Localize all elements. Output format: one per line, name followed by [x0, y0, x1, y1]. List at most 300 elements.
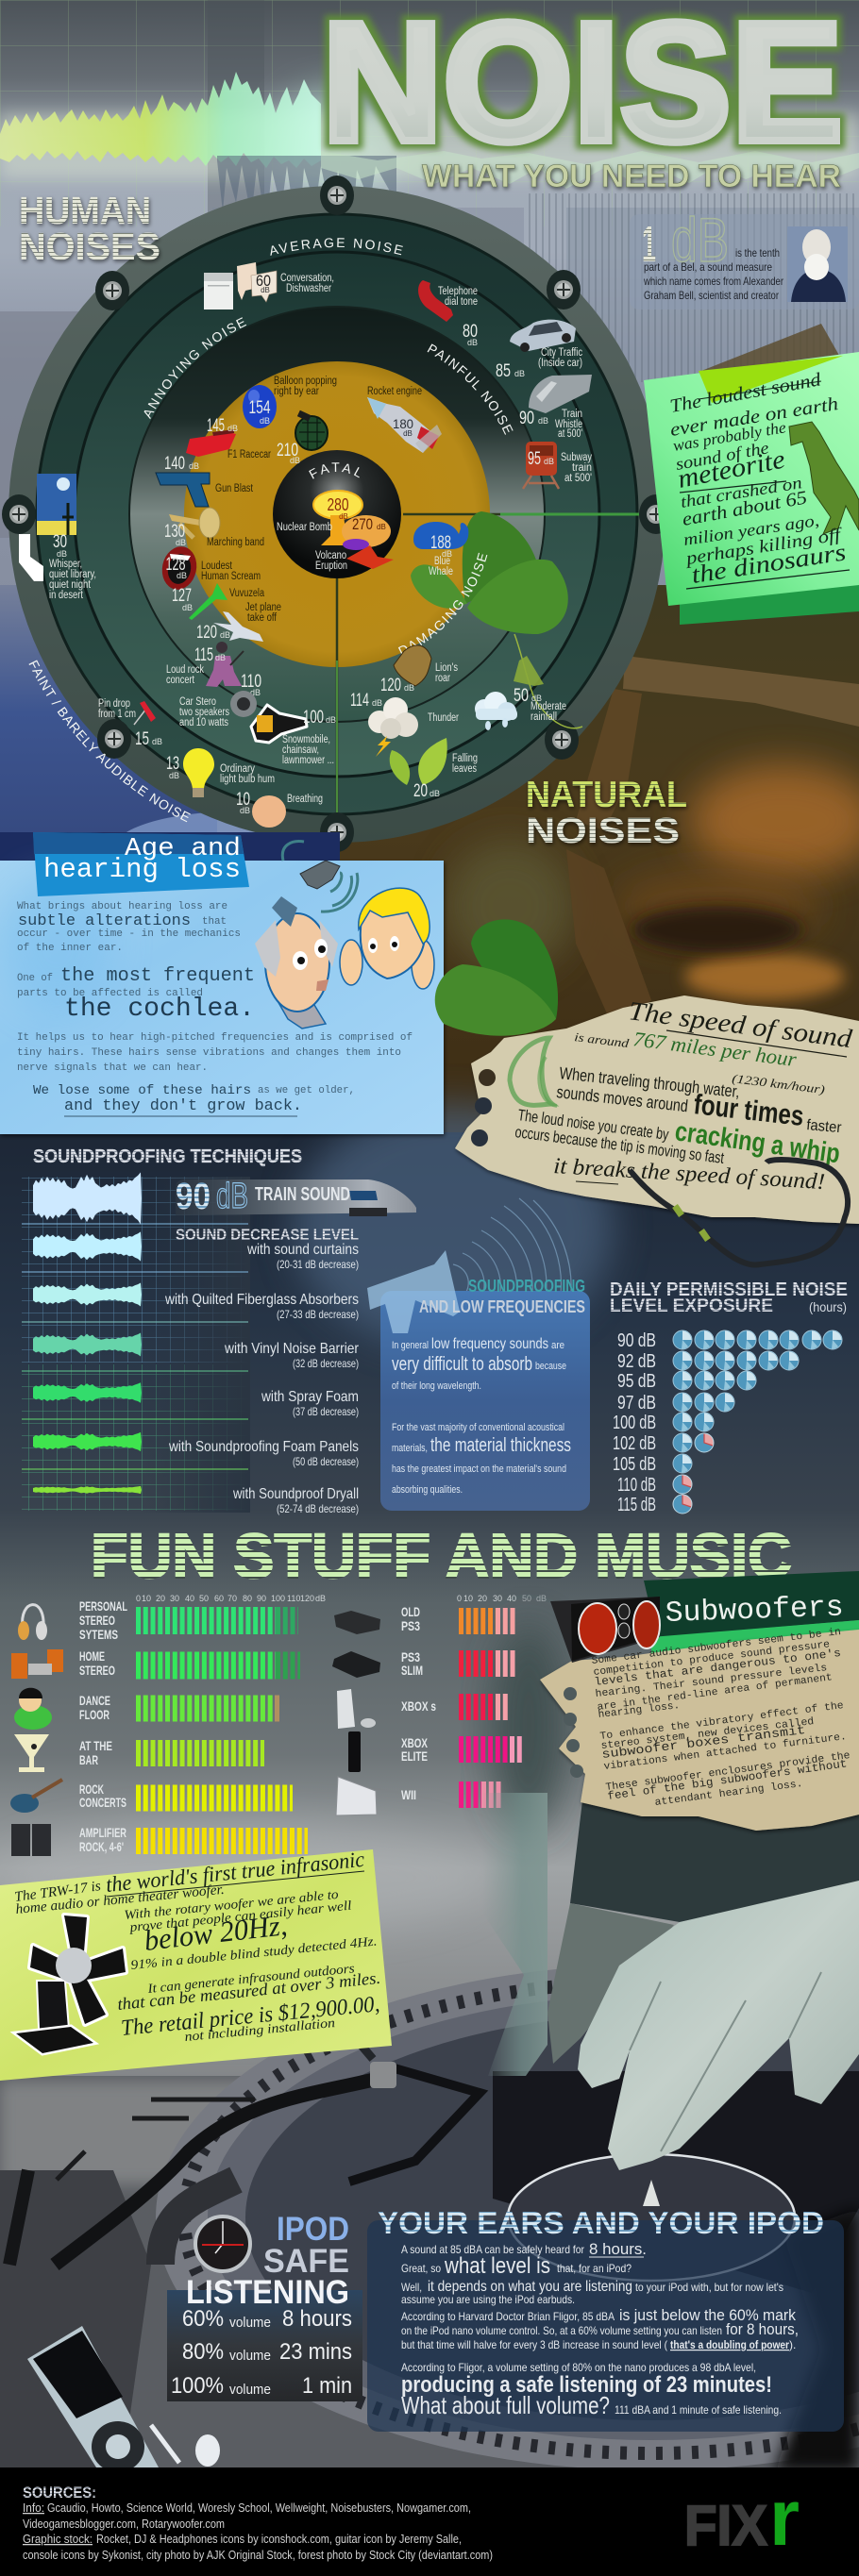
item: car stereo: two speakers: [179, 707, 229, 718]
panel: iPod safe listening: volume: [229, 2315, 271, 2331]
chart: decibel bars for music and spaces: 100: [271, 1594, 285, 1603]
item: lion's roar 120 dB: 120: [380, 676, 401, 695]
item: vuvuzela 127 dB: dB: [182, 603, 193, 612]
item: telephone 80 dB: dial tone: [445, 296, 478, 308]
background: forest: [321, 585, 859, 1151]
panel: iPod safe listening: IPOD: [277, 2211, 349, 2248]
item: train whistle 90 dB: Whistle: [555, 419, 582, 430]
icon: dishwasher: [204, 273, 233, 309]
chart: games consoles: XBOX s: [401, 1698, 436, 1714]
labels: sound decrease levels: with Vinyl Noise Barrier: [224, 1341, 360, 1357]
item: train whistle 90 dB: dB: [538, 416, 548, 426]
item: telephone 80 dB: Telephone: [438, 286, 478, 297]
labels: sound decrease levels: with Spray Foam: [261, 1389, 359, 1405]
footer: sources: Gcaudio, Howto, Science World, Woresly School, Wellweight, Noisebusters, Nowgamer.com,: [47, 2501, 471, 2515]
item: rocket engine 180 dB: [367, 386, 442, 453]
heading: soundproofing techniques: SOUNDPROOFING TECHNIQUES: [33, 1146, 302, 1167]
chart: daily permissible noise level exposure: 97 dB: [617, 1393, 656, 1413]
chart: decibel bars for music and spaces: [0, 1571, 859, 2576]
chart: decibel bars for music and spaces: HOME: [79, 1648, 105, 1664]
item: whisper 30 dB: quiet library,: [49, 569, 96, 580]
item: car stereo: and 10 watts: [179, 717, 228, 728]
item: whisper 30 dB: dB: [57, 549, 67, 559]
icon: portrait of Alexander Graham Bell: [787, 226, 848, 302]
body text: that: [202, 916, 227, 928]
item: balloon 154 dB: right by ear: [274, 386, 319, 397]
panel: your ears and your iPod: for 8 hours,: [726, 2320, 799, 2338]
chart: decibel bars for music and spaces: 30: [170, 1594, 179, 1603]
hand over record: [482, 1793, 859, 2170]
speed of sound note: 767 miles per hour: [632, 1027, 799, 1071]
ring labels: FATAL: [309, 462, 360, 479]
panel: iPod safe listening: 1 min: [302, 2373, 352, 2399]
item: chainsaw 100 dB: chainsaw,: [282, 744, 319, 756]
chart: daily permissible noise level exposure: 92 dB: [617, 1351, 656, 1372]
heading: natural noises: [526, 775, 687, 851]
item: volcano eruption 270 dB: Volcano: [315, 550, 346, 561]
item: car stereo: [179, 691, 257, 728]
chart: daily permissible noise level exposure: 90 dB: [617, 1330, 656, 1351]
note: infrasonic woofer: [0, 1848, 392, 2081]
item: volcano eruption 270 dB: 270: [352, 515, 373, 533]
item: 60 dB conversation: [237, 262, 334, 302]
item: chainsaw 100 dB: lawnmower ...: [282, 755, 334, 766]
ring labels: AVERAGE NOISE: [270, 238, 403, 256]
item: breathing 10 dB: Breathing: [287, 794, 323, 805]
panel: soundproofing and low frequencies: of their long wavelength.: [392, 1380, 481, 1392]
item: telephone 80 dB: 80: [463, 322, 478, 342]
item: human scream 128 dB: 128: [166, 555, 185, 575]
item: thunder 114 dB: Thunder: [428, 712, 459, 724]
speed of sound note: When traveling through water,: [559, 1063, 741, 1101]
item: city traffic 85 dB: City Traffic: [541, 347, 582, 359]
item: moderate rainfall 50 dB: dB: [531, 694, 542, 703]
item: breathing 10 dB: [236, 790, 323, 828]
labels: sound decrease levels: with sound curtains: [246, 1242, 359, 1258]
subwoofers panel: levels that are dangerous to one's: [594, 1647, 842, 1689]
chart: decibel bars for music and spaces: STEREO: [79, 1663, 115, 1678]
item: lion's roar 120 dB: roar: [435, 673, 450, 684]
sticky note: loudest sound: meteorite: [675, 444, 787, 494]
labels: sound decrease levels: (50 dB decrease): [293, 1455, 359, 1468]
panel: your ears and your iPod: A sound at 85 dBA can be safely heard for: [401, 2243, 584, 2256]
train with 90 dB label: TRAIN SOUND: [255, 1184, 350, 1205]
item: vuvuzela 127 dB: Vuvuzela: [229, 588, 264, 599]
icon: old man: [255, 896, 338, 1029]
ring labels: FAINT / BARELY AUDIBLE NOISE: [28, 661, 191, 823]
chart: decibel bars for music and spaces: 80: [243, 1594, 252, 1603]
body text: tiny hairs. These hairs sense vibrations and changes them into: [17, 1047, 401, 1059]
speed of sound note: faster: [806, 1117, 843, 1136]
item: jet plane 120 dB: 120: [196, 623, 217, 643]
icon: Wii: [336, 1777, 377, 1815]
item: falling leaves 20 dB: dB: [430, 789, 440, 798]
speed of sound note: occurs because the tip is moving so fast: [514, 1123, 725, 1167]
speed of sound note: The speed of sound: [627, 996, 854, 1054]
chart: games consoles: XBOX: [401, 1735, 428, 1750]
body text: the cochlea.: [64, 995, 255, 1024]
item: gun blast 140 dB: [156, 454, 254, 507]
item: train whistle 90 dB: Train: [562, 409, 582, 420]
item: vuvuzela 127 dB: [172, 583, 264, 620]
labels: sound decrease levels: with Soundproofing Foam Panels: [168, 1439, 359, 1455]
icon: cocktail: [14, 1734, 49, 1772]
panel: age and hearing loss: [0, 832, 444, 1134]
sticky note: loudest sound: [644, 324, 859, 625]
item: pin drop 15 dB: from 1 cm: [98, 709, 136, 720]
tape heading: hearing loss: [43, 854, 241, 885]
body text: occur - over time - in the mechanics: [17, 928, 241, 940]
body text: One of: [17, 973, 53, 984]
panel: your ears and your iPod: what level is: [444, 2253, 550, 2279]
item: rocket engine 180 dB: dB: [403, 429, 413, 438]
panel: soundproofing and low frequencies: absorbing qualities.: [392, 1484, 463, 1496]
item: whisper 30 dB: [19, 474, 96, 601]
chart: daily permissible noise level exposure: 110 dB: [617, 1475, 656, 1496]
subwoofers panel: vibrations when attached to furniture.: [603, 1731, 848, 1773]
item: light bulb 13 dB: [166, 748, 275, 797]
item: grenade 210 dB: [277, 410, 328, 465]
note: infrasonic woofer: that can be measured at over 3 miles.: [116, 1968, 381, 2014]
item: pin drop 15 dB: dB: [152, 737, 162, 746]
note: infrasonic woofer: 91% in a double blind study detected 4Hz.: [130, 1934, 378, 1973]
speed of sound note: [455, 995, 859, 1224]
icon: PS3 slim: [332, 1651, 380, 1678]
panel: your ears and your iPod: 111 dBA and 1 minute of safe listening.: [615, 2403, 782, 2417]
body text: of the inner ear.: [17, 943, 123, 954]
panel: your ears and your iPod: producing a safe listening of 23 minutes!: [401, 2372, 772, 2398]
item: telephone 80 dB: dB: [467, 338, 478, 347]
panel: your ears and your iPod: Great, so: [401, 2262, 441, 2275]
sticky note: loudest sound: the dinosaurs: [690, 538, 848, 589]
icon: home stereo: [11, 1649, 63, 1679]
panel: your ears and your iPod: assume you are using the iPod earbuds.: [401, 2293, 575, 2306]
item: car stereo: Car Stero: [179, 696, 216, 708]
body text: nerve signals that we can hear.: [17, 1062, 208, 1074]
item: falling leaves 20 dB: Falling: [452, 753, 478, 764]
footer: sources: console icons by Sykonist, city photo by AJK Original Stock, forest photo by Stock City (deviantart.com): [23, 2548, 493, 2562]
item: rock concert 115 dB: concert: [166, 675, 195, 686]
item: rock concert 115 dB: dB: [250, 688, 261, 697]
item: pin drop 15 dB: [98, 698, 162, 749]
item: jet plane 120 dB: Jet plane: [245, 602, 281, 613]
item: moderate rainfall 50 dB: Moderate: [531, 701, 566, 712]
ring labels: [28, 238, 514, 823]
heading: human noises: HUMAN: [19, 189, 151, 232]
logo: FIXr: [684, 2473, 800, 2562]
chart: decibel bars for music and spaces: 20: [156, 1594, 165, 1603]
item: marching band 130 dB: dB: [176, 538, 186, 547]
icon: Xbox Elite: [348, 1731, 361, 1772]
item: moderate rainfall 50 dB: [475, 686, 566, 730]
panel: your ears and your iPod: [367, 2205, 844, 2432]
item: balloon 154 dB: 154: [249, 398, 271, 418]
note: infrasonic woofer: not including installation: [184, 2016, 336, 2045]
subwoofers panel: stereo system, new devices called: [600, 1716, 815, 1752]
item: gun blast 140 dB: dB: [189, 461, 199, 471]
chart: games consoles: 10: [463, 1594, 473, 1603]
subwoofers panel: These subwoofer enclosures provide the: [605, 1750, 851, 1794]
item: lion's roar 120 dB: dB: [404, 683, 414, 693]
sticky note: loudest sound: that crashed on: [679, 473, 803, 511]
item: balloon 154 dB: Balloon popping: [274, 376, 337, 387]
item: F1 racecar 145 dB: F1 Racecar: [227, 449, 271, 460]
chart: games consoles: 20: [478, 1594, 487, 1603]
background: dark and grey lower section: [0, 1104, 859, 2076]
body text: and they don't grow back.: [64, 1097, 302, 1115]
footer: sources: Videogamesblogger.com, Rotarywoofer.com: [23, 2517, 225, 2531]
subwoofers panel: feel of the big subwoofers without: [607, 1757, 848, 1803]
item: chainsaw 100 dB: dB: [326, 715, 336, 725]
icon: clock: [195, 2216, 250, 2271]
waveform banner: [0, 72, 859, 245]
chart: daily permissible noise level exposure: LEVEL EXPOSURE: [610, 1296, 773, 1316]
item: subway train 95 dB: train: [572, 462, 592, 474]
chart: circular noise dial: [2, 176, 663, 851]
item: grenade 210 dB: 210: [277, 441, 298, 460]
sticky note: loudest sound: earth about 65: [681, 487, 809, 530]
item: human scream 128 dB: [159, 544, 261, 593]
icon: rotary woofer fan: [16, 1915, 126, 2053]
item: blue whale 188 dB: Blue: [434, 556, 450, 567]
body text: parts to be affected is called: [17, 988, 203, 999]
speed of sound note: four times: [692, 1089, 805, 1132]
panel: iPod safe listening: volume: [229, 2348, 271, 2364]
labels: sound decrease levels: (32 dB decrease): [293, 1357, 359, 1370]
item: jet plane 120 dB: dB: [220, 630, 230, 640]
speed of sound note: is around: [574, 1029, 631, 1050]
panel: your ears and your iPod: on the iPod nano volume control. So, at a 60% volume setting you can listen: [401, 2324, 722, 2337]
subwoofers panel: To enhance the vibratory effect of the: [599, 1700, 844, 1743]
item: 60 dB conversation: dB: [261, 286, 270, 294]
note: infrasonic woofer: home audio or home theater woofer.: [15, 1882, 225, 1917]
icon: headphones: [18, 1605, 47, 1640]
labels: sound decrease levels: SOUND DECREASE LEVEL: [176, 1226, 359, 1244]
item: whisper 30 dB: Whisper,: [49, 559, 82, 570]
chart: decibel bars for music and spaces: ROCK, 4-6': [79, 1839, 124, 1854]
item: falling leaves 20 dB: 20: [413, 781, 428, 801]
chart: decibel bars for music and spaces: 60: [214, 1594, 224, 1603]
panel: your ears and your iPod: Well,: [401, 2281, 422, 2294]
note: infrasonic woofer: The TRW-17 is: [13, 1879, 102, 1905]
item: thunder 114 dB: 114: [350, 691, 369, 711]
tonearm: [9, 2033, 480, 2265]
subwoofers panel: attendant hearing loss.: [654, 1779, 803, 1809]
heading: natural noises: NATURAL: [526, 775, 687, 815]
item: human scream 128 dB: Human Scream: [201, 571, 261, 582]
chart: decibel bars for music and spaces: 0: [136, 1594, 141, 1603]
sticky note: loudest sound: The loudest sound: [668, 369, 823, 417]
tape heading: Age and: [125, 835, 241, 863]
note: infrasonic woofer: It can generate infrasound outdoors: [146, 1962, 356, 1997]
panel: your ears and your iPod: to your iPod with, but for now let's: [635, 2281, 783, 2294]
sticky note: loudest sound: sound of the: [674, 438, 770, 474]
chart: games consoles: [332, 1594, 547, 1815]
body text: subtle alterations: [18, 912, 191, 930]
item: blue whale 188 dB: dB: [442, 549, 452, 559]
item: nuclear bomb 280 dB: dB: [339, 512, 348, 521]
item: rock concert 115 dB: Loud rock: [166, 664, 204, 676]
heading: human noises: NOISES: [19, 225, 160, 268]
note: infrasonic woofer: prove that people can easily hear well: [128, 1899, 352, 1935]
note: infrasonic woofer: The retail price is $12,900.00,: [120, 1992, 380, 2041]
subwoofers panel: hearing. Their sound pressure levels: [595, 1663, 828, 1700]
item: pin drop 15 dB: 15: [135, 729, 149, 749]
item: city traffic 85 dB: dB: [514, 369, 525, 378]
heart leaf: [435, 919, 558, 1036]
item: marching band 130 dB: 130: [164, 522, 185, 542]
subwoofers panel: competition to produce sound pressure: [593, 1639, 831, 1679]
item: city traffic 85 dB: [496, 320, 582, 381]
panel: soundproofing and low frequencies: materials,: [392, 1443, 428, 1454]
speed of sound note: The loud noise you create by: [516, 1106, 670, 1144]
item: city traffic 85 dB: (Inside car): [538, 358, 582, 369]
speed of sound note: it breaks the speed of sound!: [553, 1154, 826, 1195]
panel: soundproofing and low frequencies: has the greatest impact on the material's sound: [392, 1464, 566, 1475]
item: blue whale 188 dB: Whale: [429, 566, 453, 577]
chart: decibel bars for music and spaces: AT THE: [79, 1738, 112, 1753]
icon: dinosaur: [789, 422, 859, 534]
panel: 1 dB definition: which name comes from Alexander: [643, 275, 783, 288]
subwoofers panel: Subwoofers: [665, 1591, 844, 1631]
panel: 1 dB definition: 1: [642, 216, 656, 273]
chart: decibel bars for music and spaces: 120: [300, 1594, 314, 1603]
item: city traffic 85 dB: 85: [496, 361, 511, 381]
panel: your ears and your iPod: YOUR EARS AND YOUR IPOD: [378, 2205, 824, 2240]
item: human scream 128 dB: Loudest: [201, 560, 233, 572]
item: gun blast 140 dB: 140: [164, 454, 185, 474]
chart: games consoles: 40: [507, 1594, 516, 1603]
subwoofers panel: Some car audio subwoofers seem to be in: [591, 1627, 842, 1667]
item: light bulb 13 dB: light bulb hum: [220, 774, 275, 785]
chart: games consoles: 30: [493, 1594, 502, 1603]
item: blue whale 188 dB: 188: [430, 533, 451, 553]
panel: iPod safe listening: LISTENING: [186, 2274, 349, 2311]
item: light bulb 13 dB: Ordinary: [220, 763, 255, 775]
speed of sound note: (1230 km/hour): [732, 1071, 826, 1096]
item: rock concert 115 dB: [166, 642, 261, 697]
icon: whistle with sound waves: [282, 842, 358, 912]
subwoofers panel: are in the red-line area of permanent: [597, 1672, 833, 1714]
item: chainsaw 100 dB: Snowmobile,: [282, 734, 330, 745]
item: whisper 30 dB: quiet night: [49, 579, 92, 591]
item: balloon 154 dB: [243, 376, 337, 428]
chart: daily permissible noise level exposure: DAILY PERMISSIBLE NOISE: [610, 1280, 848, 1300]
panel: iPod safe listening: 60%: [182, 2306, 224, 2332]
sticky note: loudest sound: ever made on earth: [668, 393, 840, 441]
item: F1 racecar 145 dB: [186, 416, 271, 460]
panel: your ears and your iPod: but that time will halve for every 3 dB increase in sound level (: [401, 2338, 667, 2351]
panel: iPod safe listening: volume: [229, 2382, 271, 2398]
logo: FIXr: r: [769, 2473, 800, 2562]
item: balloon 154 dB: dB: [260, 416, 270, 426]
icon: blonde child covering ears: [340, 888, 434, 989]
panel: iPod safe listening: [167, 2211, 362, 2401]
item: subway train 95 dB: Subway: [561, 452, 592, 463]
item: pin drop 15 dB: Pin drop: [98, 698, 130, 710]
chart: games consoles: 50: [522, 1594, 531, 1603]
item: falling leaves 20 dB: [390, 738, 478, 801]
panel: your ears and your iPod: ).: [789, 2338, 796, 2351]
train with 90 dB label: 90: [176, 1176, 211, 1217]
labels: sound decrease levels: (37 dB decrease): [293, 1405, 359, 1418]
item: nuclear bomb 280 dB: [277, 491, 362, 545]
chart: daily permissible noise level exposure: 102 dB: [613, 1433, 656, 1454]
item: jet plane 120 dB: [196, 602, 281, 643]
chart: decibel bars for music and spaces: STEREO: [79, 1613, 115, 1628]
platter: [0, 1965, 859, 2472]
item: light bulb 13 dB: dB: [169, 771, 179, 780]
body text: We lose some of these hairs: [33, 1083, 251, 1098]
screws: [2, 176, 673, 852]
footer: sources: Graphic stock:: [23, 2532, 93, 2546]
footer: sources: Rocket, DJ & Headphones icons by iconshock.com, guitar icon by Jeremy Salle,: [96, 2532, 462, 2546]
item: rock concert 115 dB: dB: [215, 653, 226, 662]
item: vuvuzela 127 dB: 127: [172, 586, 192, 606]
icon: DJ: [14, 1688, 52, 1730]
chart: games consoles: OLD: [401, 1604, 420, 1619]
sticky note: loudest sound: was probably the: [672, 418, 787, 455]
icon: whip: [630, 1160, 848, 1264]
panel: soundproofing and low frequencies: AND LOW FREQUENCIES: [419, 1297, 585, 1316]
chart: games consoles: ELITE: [401, 1748, 428, 1764]
logo: FIXr: FIX: [684, 2494, 767, 2557]
chart: decibel bars for music and spaces: 40: [185, 1594, 194, 1603]
ring labels: PAINFUL NOISE: [427, 343, 514, 435]
item: volcano eruption 270 dB: Eruption: [315, 560, 347, 572]
panel: 1 dB definition: is the tenth: [735, 246, 780, 259]
labels: sound decrease levels: (52-74 dB decrease): [277, 1502, 359, 1515]
chart: daily permissible noise level exposure: 100 dB: [613, 1413, 656, 1433]
note: infrasonic woofer: With the rotary woofer we are able to: [124, 1888, 339, 1923]
item: subway train 95 dB: dB: [544, 457, 554, 466]
panel: your ears and your iPod: According to Harvard Doctor Brian Fligor, 85 dBA: [401, 2310, 615, 2323]
decorative clover leaf on dial: [411, 511, 582, 728]
panel: soundproofing and low frequencies: SOUNDPROOFING: [468, 1277, 585, 1296]
train with 90 dB label: dB: [216, 1177, 248, 1216]
labels: sound decrease levels: (27-33 dB decrease): [277, 1308, 359, 1321]
panel: 1 dB definition: part of a Bel, a sound measure: [644, 260, 772, 274]
panel: soundproofing and low frequencies: low frequency sounds: [431, 1336, 548, 1352]
chart: daily permissible noise level exposure: 95 dB: [617, 1371, 656, 1392]
item: rocket engine 180 dB: Rocket engine: [367, 386, 422, 397]
panel: 1 dB definition: dB: [671, 205, 729, 275]
panel: your ears and your iPod: What about full volume?: [401, 2391, 610, 2419]
panel: iPod safe listening: 80%: [182, 2339, 224, 2365]
item: marching band 130 dB: [164, 508, 264, 548]
item: whisper 30 dB: 30: [53, 532, 67, 552]
icon: speakers: [11, 1824, 51, 1856]
panel: your ears and your iPod: that, for an iPod?: [557, 2262, 632, 2275]
item: lion's roar 120 dB: [380, 645, 458, 695]
body text: as we get older,: [258, 1085, 355, 1096]
chart: decibel bars for music and spaces: BAR: [79, 1752, 98, 1767]
panel: soundproofing and low frequencies: For the vast majority of conventional acoustical: [392, 1422, 564, 1433]
sticky note: loudest sound: milion years ago,: [682, 510, 820, 549]
chart: decibel bars for music and spaces: ROCK: [79, 1781, 104, 1797]
chart: games consoles: SLIM: [401, 1663, 423, 1678]
panel: soundproofing and low frequencies: are: [551, 1340, 564, 1351]
item: 60 dB conversation: Conversation,: [280, 273, 334, 284]
item: gun blast 140 dB: Gun Blast: [215, 483, 254, 494]
chart: decibel bars for music and spaces: CONCERTS: [79, 1795, 126, 1810]
waveform rows: [22, 1172, 250, 1513]
item: subway train 95 dB: at 500': [564, 473, 592, 484]
item: breathing 10 dB: dB: [240, 806, 250, 815]
item: falling leaves 20 dB: leaves: [452, 763, 477, 775]
chart: decibel bars for music and spaces: AMPLIFIER: [79, 1825, 126, 1840]
item: thunder 114 dB: dB: [372, 698, 382, 708]
